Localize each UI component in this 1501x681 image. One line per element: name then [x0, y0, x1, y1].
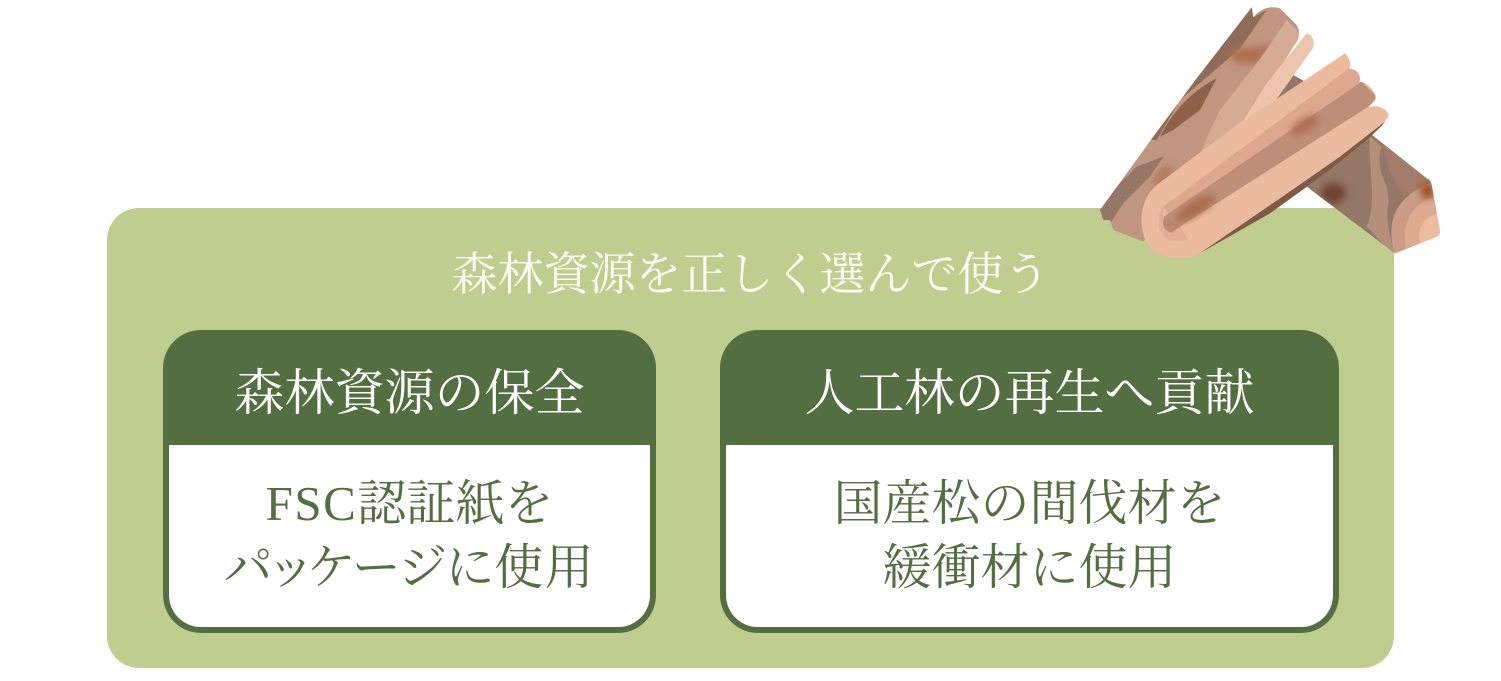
panel: left card: [163, 330, 656, 633]
front split log: [1137, 50, 1397, 263]
right card heading: 人工林の再生へ貢献: [804, 365, 1254, 421]
heading: main title: 森林資源を正しく選んで使う: [452, 249, 1050, 300]
left card text line 1: FSC認証紙を: [266, 476, 553, 531]
split wood piece: [1237, 33, 1314, 132]
left card text line 2: パッケージに使用: [224, 540, 595, 595]
left log: [1100, 7, 1300, 242]
right card text line 2: 緩衝材に使用: [882, 540, 1176, 595]
left card body: [169, 445, 650, 627]
right card body: [726, 445, 1333, 627]
right card text line 1: 国産松の間伐材を: [833, 476, 1226, 531]
icon: wooden logs: [1100, 7, 1440, 258]
left card heading: 森林資源の保全: [234, 365, 584, 421]
back log: [1276, 75, 1440, 254]
panel: green background: [107, 208, 1394, 668]
panel: right card: [720, 330, 1339, 633]
